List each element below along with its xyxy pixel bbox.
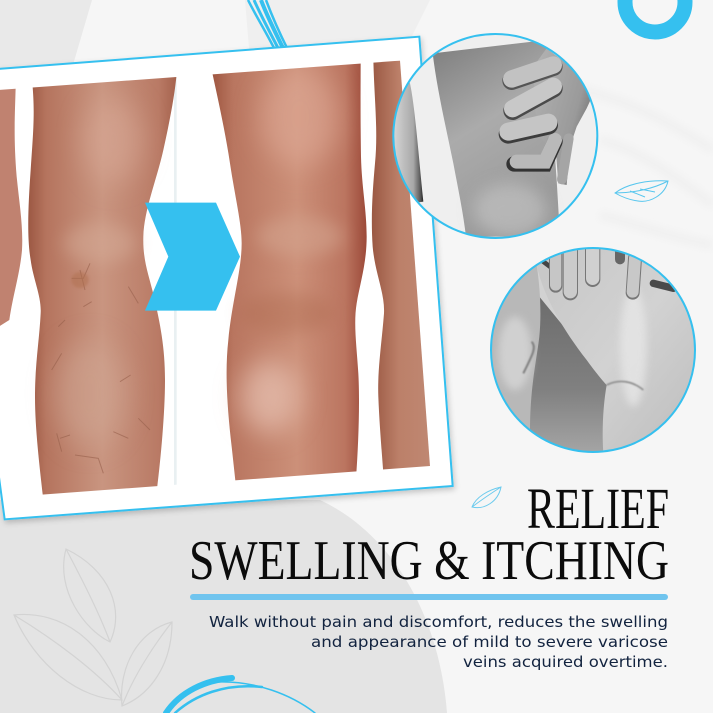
panel: before and after photo bbox=[0, 37, 467, 519]
leaf outline: upper bbox=[64, 549, 116, 642]
photo frame bbox=[0, 37, 453, 519]
leaf outline: left bbox=[14, 614, 122, 700]
divider line bbox=[174, 73, 177, 487]
circle outline bbox=[393, 34, 597, 238]
description text: veins acquired overtime. bbox=[463, 653, 668, 671]
icon: small blue leaf lower bbox=[472, 487, 501, 508]
leaf outline: right bbox=[122, 622, 172, 706]
background shape: top middle bbox=[245, 0, 430, 60]
brush ring: top bbox=[248, 0, 288, 50]
icon: small blue leaf right bbox=[615, 181, 668, 201]
photo circle: scratching hand bbox=[390, 34, 597, 238]
gap between legs bbox=[530, 298, 607, 451]
leg: far right bbox=[372, 60, 430, 470]
description text: and appearance of mild to severe varicose bbox=[311, 633, 668, 651]
fingers bbox=[508, 65, 569, 179]
photo area bbox=[0, 60, 430, 495]
background shape: top left bbox=[0, 0, 92, 75]
adjacent leg bbox=[394, 82, 424, 202]
decorative leaves: bottom left bbox=[14, 549, 172, 706]
brush ring: bottom bbox=[166, 678, 315, 713]
photo circle: hands on thigh bbox=[487, 243, 700, 453]
background shape: bottom left blob bbox=[0, 500, 447, 713]
left leg bbox=[492, 266, 540, 429]
background shadow: palm leaves bbox=[510, 84, 713, 245]
circle outline bbox=[491, 248, 695, 452]
title bbox=[189, 476, 669, 592]
main leg bbox=[433, 40, 560, 237]
divider bar bbox=[190, 594, 668, 600]
hand palm bbox=[538, 49, 590, 185]
leg: far left bbox=[0, 87, 22, 330]
spider veins bbox=[52, 263, 150, 473]
accent ring: top right bbox=[625, 0, 685, 32]
leg: after treatment bbox=[212, 60, 367, 487]
fingers bbox=[543, 243, 673, 293]
description text bbox=[209, 613, 668, 671]
chevron arrow bbox=[145, 203, 240, 311]
right thigh bbox=[537, 247, 700, 453]
leg: before treatment bbox=[28, 73, 177, 500]
description text: Walk without pain and discomfort, reduces the swelling bbox=[209, 613, 668, 631]
